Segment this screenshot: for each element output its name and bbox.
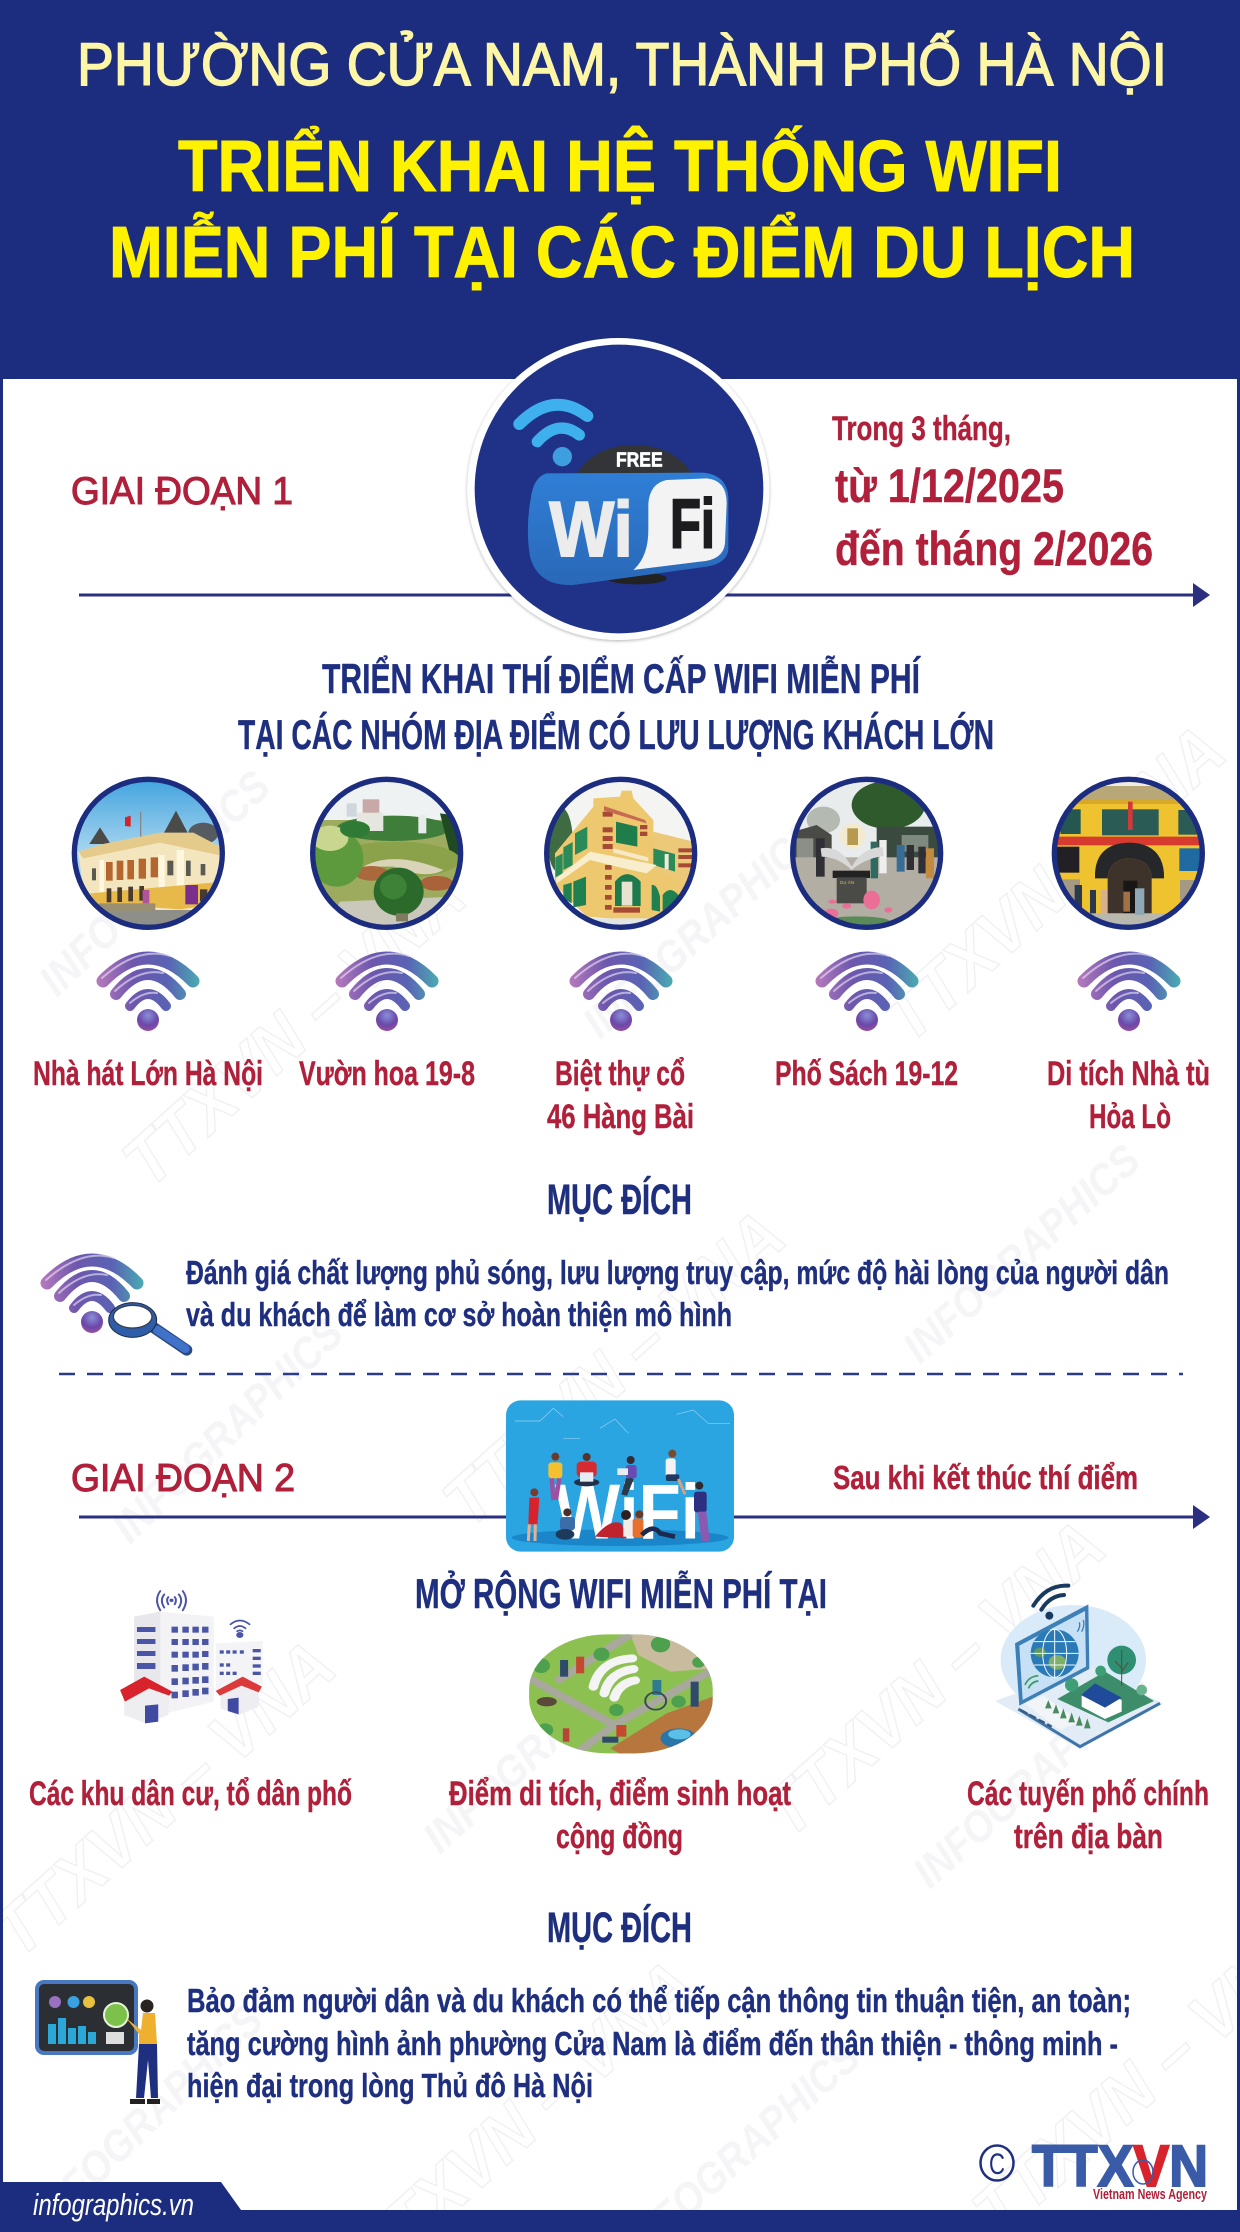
icon: wifi under Hoa Lo <box>1083 954 1174 1031</box>
photo: villa 46 Hang Bai <box>543 777 700 932</box>
location labels: 46 Hàng Bài <box>547 1098 694 1136</box>
watermark: INFOGRAPHICS <box>23 1996 273 2232</box>
photo: Hoa Lo prison <box>1050 777 1207 930</box>
purpose heading 2: MỤC ĐÍCH <box>547 1904 692 1952</box>
website label: infographics.vn <box>33 2187 194 2222</box>
location labels: Biệt thự cổ <box>555 1055 685 1093</box>
watermark <box>0 710 1240 2232</box>
photo: Book Street 19-12: Dự ÁN <box>840 879 854 885</box>
icon: wifi under flower garden <box>341 954 432 1031</box>
watermark: INFOGRAPHICS <box>30 762 280 1005</box>
purpose text 1: và du khách để làm cơ sở hoàn thiện mô hình <box>186 1296 732 1333</box>
watermark: INFOGRAPHICS <box>574 810 830 1047</box>
location labels: Hỏa Lò <box>1089 1098 1171 1136</box>
location groups labels: Điểm di tích, điểm sinh hoạt <box>449 1775 791 1813</box>
phase 1 timing: đến tháng 2/2026 <box>835 522 1153 575</box>
phase 2 heading: MỞ RỘNG WIFI MIỄN PHÍ TẠI <box>415 1569 827 1617</box>
phase 1 heading <box>238 654 994 758</box>
phase 1 timing <box>832 410 1153 575</box>
phase 2 arrow <box>79 1505 1210 1529</box>
location groups labels <box>29 1775 1209 1856</box>
phase 2 timing: Sau khi kết thúc thí điểm <box>833 1459 1138 1496</box>
icon: free wifi badge <box>467 338 769 640</box>
image: people around WiFi sign: WiFi <box>555 1467 700 1555</box>
icon: presenter with dashboard <box>37 1982 160 2104</box>
watermark: TTXVN – VNA <box>748 1505 1120 1851</box>
phase 1 arrow <box>79 583 1210 607</box>
icon: free wifi badge: Wi <box>549 485 633 573</box>
icon: wifi under Opera House <box>102 954 193 1031</box>
person: reclining man <box>633 1510 675 1538</box>
person: standing man <box>694 1482 707 1541</box>
copyright mark: C <box>989 2148 1005 2181</box>
person: purple top <box>617 1456 637 1495</box>
person: laptop user <box>574 1453 599 1486</box>
location groups labels: Các khu dân cư, tổ dân phố <box>29 1775 352 1813</box>
icon: free wifi badge: Fi <box>670 484 715 562</box>
icon: residential buildings <box>120 1591 263 1723</box>
purpose text 1 <box>186 1254 1169 1333</box>
title block <box>77 31 1167 293</box>
person: reclining woman <box>595 1510 636 1538</box>
icon: park with wifi <box>526 1632 715 1755</box>
person: white tee <box>666 1450 685 1494</box>
image: people around WiFi sign <box>506 1400 734 1555</box>
photo: Opera House <box>70 777 227 930</box>
location labels <box>33 1055 1210 1136</box>
title block: MIỄN PHÍ TẠI CÁC ĐIỂM DU LỊCH <box>109 212 1135 293</box>
person: seated man <box>556 1508 575 1540</box>
icon: laptop with house and globe <box>995 1586 1163 1749</box>
purpose text 2: hiện đại trong lòng Thủ đô Hà Nội <box>187 2067 593 2104</box>
purpose text 2 <box>187 1982 1131 2104</box>
watermark: INFOGRAPHICS <box>414 1625 670 1862</box>
phase 1 timing: từ 1/12/2025 <box>835 459 1064 512</box>
person: red dress <box>528 1488 539 1541</box>
photo: Book Street 19-12 <box>790 777 947 931</box>
title block: PHƯỜNG CỬA NAM, THÀNH PHỐ HÀ NỘI <box>77 31 1167 98</box>
location labels: Phố Sách 19-12 <box>775 1055 958 1093</box>
location labels: Vườn hoa 19-8 <box>299 1055 475 1093</box>
location labels: Nhà hát Lớn Hà Nội <box>33 1055 263 1093</box>
phase 1 timing: Trong 3 tháng, <box>832 410 1011 448</box>
icon: wifi under villa <box>575 954 666 1031</box>
watermark: TTXVN – VNA <box>428 1195 800 1541</box>
phase 2 label: GIAI ĐOẠN 2 <box>71 1457 295 1500</box>
title block: TRIỂN KHAI HỆ THỐNG WIFI <box>178 125 1062 207</box>
icon: wifi under Book Street <box>821 954 912 1031</box>
watermark: INFOGRAPHICS <box>894 1135 1150 1372</box>
footer tab <box>0 2182 241 2232</box>
icon: wifi with magnifier <box>46 1256 187 1350</box>
phase 1 heading: TRIỂN KHAI THÍ ĐIỂM CẤP WIFI MIỄN PHÍ <box>322 654 921 702</box>
copyright mark <box>980 2146 1014 2181</box>
watermark: INFOGRAPHICS <box>103 1309 353 1552</box>
watermark: TTXVN – VNA <box>108 855 480 1201</box>
icon: free wifi badge: FREE <box>616 450 663 472</box>
watermark: INFOGRAPHICS <box>904 1660 1160 1897</box>
location groups labels: trên địa bàn <box>1014 1818 1163 1856</box>
person: yellow top <box>548 1453 562 1500</box>
location groups labels: cộng đồng <box>556 1818 683 1856</box>
phase 1 label: GIAI ĐOẠN 1 <box>71 470 293 513</box>
purpose heading 1: MỤC ĐÍCH <box>547 1176 692 1224</box>
logo: TTXVN: TTXVN <box>1032 2134 1208 2199</box>
photo: 19-8 flower garden <box>310 777 467 930</box>
